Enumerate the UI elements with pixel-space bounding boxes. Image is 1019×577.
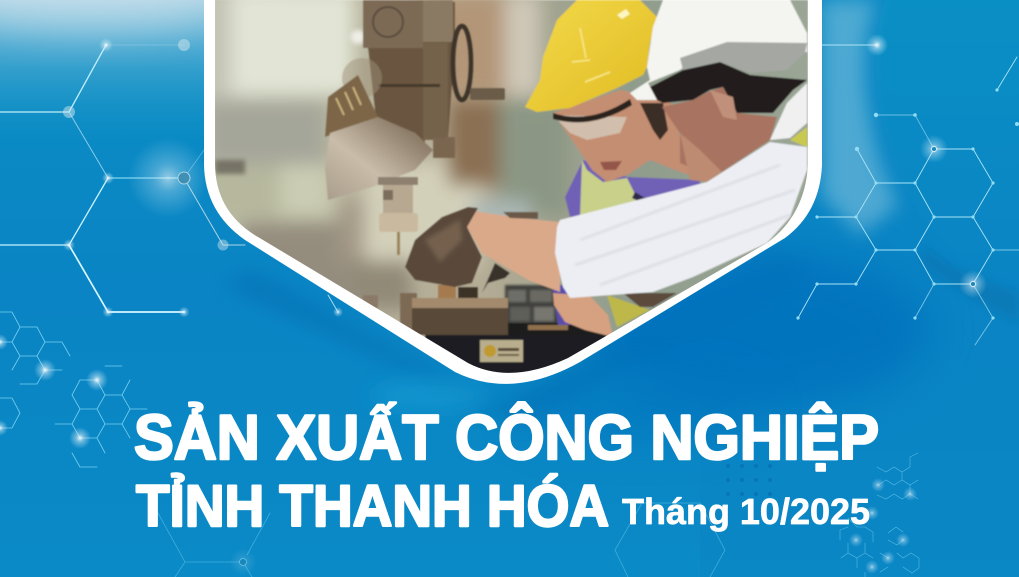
white helmet [630, 0, 807, 100]
blurred factory background [205, 0, 570, 312]
network lines: left large hexagons [0, 38, 343, 318]
network lines: lower left small hexagons [0, 312, 147, 467]
first worker face [553, 90, 690, 182]
drill machine head [342, 0, 505, 158]
workpiece block [363, 285, 508, 335]
drill spindle [378, 177, 418, 255]
gloved hand [405, 207, 538, 293]
title [134, 402, 879, 539]
dark patch at left edge [215, 160, 245, 174]
keyboard-like panel [505, 285, 560, 325]
date label: Tháng 10/2025 [622, 491, 870, 532]
collar and right vest [770, 83, 807, 147]
machine lamp [325, 75, 433, 200]
network lines: right hexagons [796, 34, 1019, 345]
photo: workers at drilling machine [205, 0, 808, 380]
purple shirt and vest [565, 160, 700, 217]
white shield frame [204, 0, 822, 384]
yellow helmet [525, 0, 657, 112]
bare forearm [467, 210, 560, 292]
soft light spot [351, 30, 365, 44]
white striped shirt [555, 142, 807, 298]
machine base [424, 322, 608, 373]
safety glasses [553, 99, 632, 140]
lower purple sleeve, hand and vest [552, 285, 677, 337]
second worker hair [650, 62, 807, 113]
second worker face [662, 87, 777, 182]
network lines: bottom hexagons [158, 453, 919, 577]
photo backdrop [215, 0, 808, 338]
decorative dot grid [726, 464, 772, 496]
title line 2: TỈNH THANH HÓA [136, 474, 609, 539]
title line 1: SẢN XUẤT CÔNG NGHIỆP [134, 402, 879, 473]
